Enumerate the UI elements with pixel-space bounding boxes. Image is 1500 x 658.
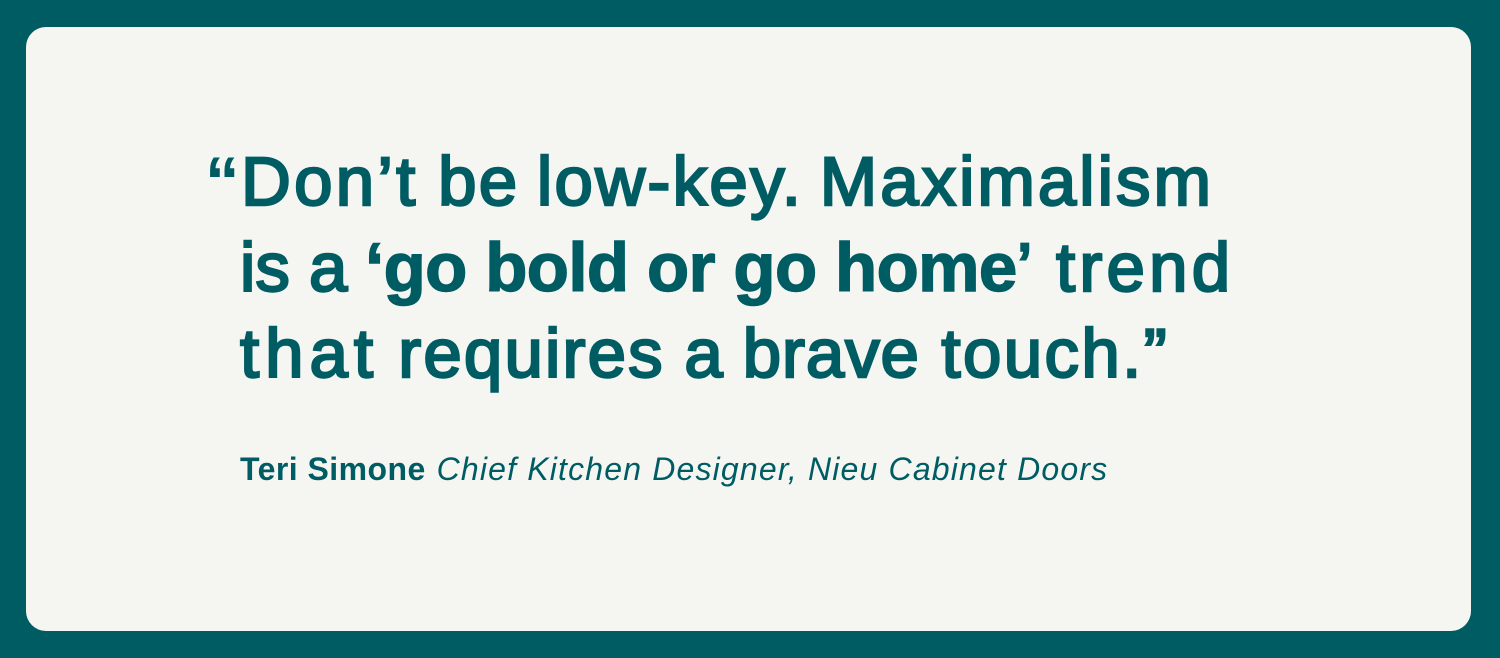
quote text (205, 143, 1234, 393)
quote line 2: trend (1056, 229, 1234, 306)
quote line 2: is a (240, 229, 347, 306)
quote line 1: “ (205, 143, 239, 220)
attribution: Teri Simone Chief Kitchen Designer, Nieu Cabinet Doors (240, 451, 1108, 487)
quote line 1: Don’t be low-key. Maximalism (241, 143, 1214, 220)
quote line 2: ’ (1017, 229, 1034, 306)
quote line 2: ‘go bold or go home (365, 229, 1017, 306)
quote line 2 (240, 229, 1234, 306)
quote line 3: that requires a brave touch.” (240, 315, 1169, 392)
